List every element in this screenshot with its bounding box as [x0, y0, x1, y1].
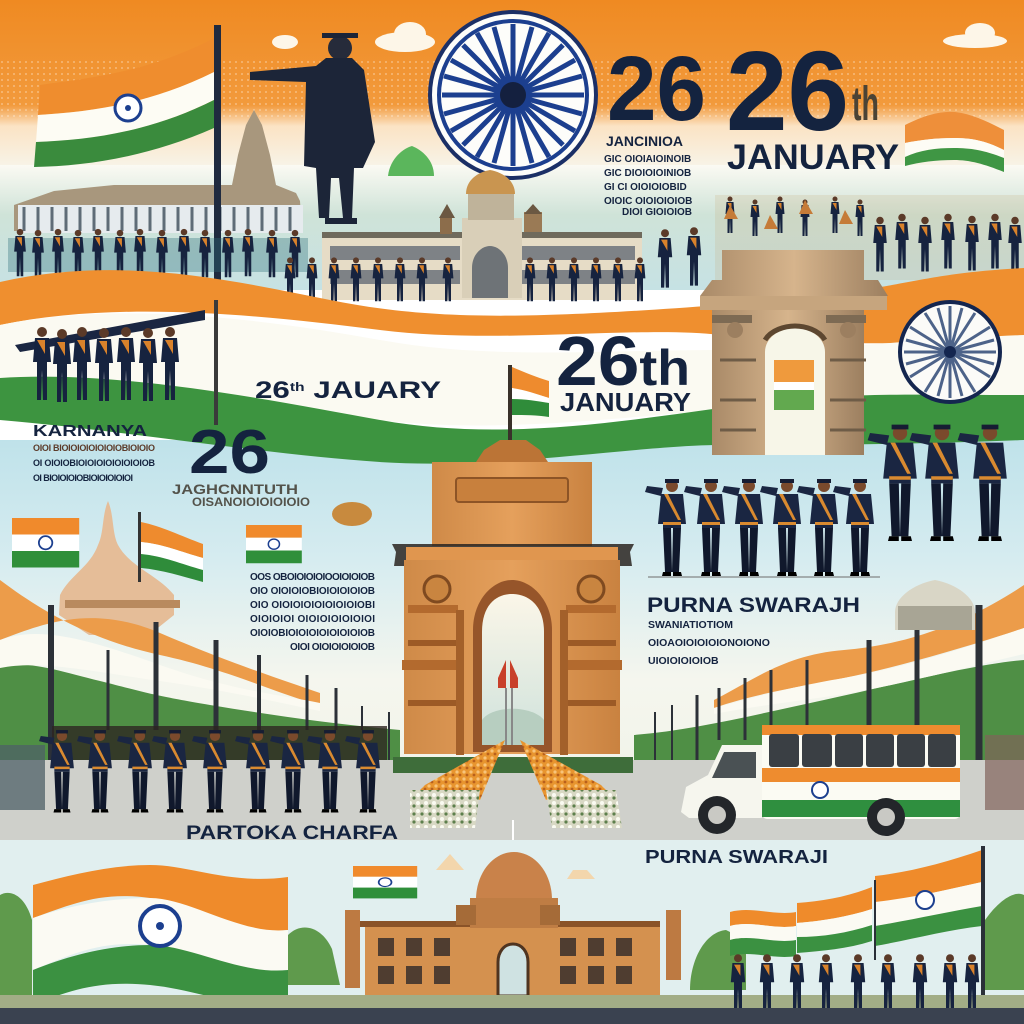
- dome right: [895, 580, 975, 630]
- text block right of gate: SWANIATIOTIOM: [648, 619, 733, 631]
- wave band: orange white green tricolor: [0, 268, 1024, 464]
- left text: karnanya: OI BIOIOIOIOBIOIOIOIOIOI: [33, 473, 133, 483]
- heading: 26 26 th: JANUARY: [727, 138, 899, 177]
- left text: karnanya: [33, 423, 156, 483]
- green dome sketch: [388, 146, 434, 176]
- small text block top centre: GIC OIOIAIOINOIB: [604, 154, 691, 165]
- bottom left flag: [33, 865, 288, 1007]
- marching band: [39, 726, 387, 812]
- lower right flags: [730, 846, 985, 1011]
- crowd: top right: [658, 195, 1024, 288]
- ground strip: [0, 995, 1024, 1010]
- heading: 26 26 th: 26: [607, 38, 706, 140]
- chakra right: [900, 302, 1000, 402]
- bus: [681, 725, 960, 836]
- background white ribbon left: [0, 634, 320, 711]
- heading: 26th january left of wave: 26: [255, 377, 282, 404]
- background orange ribbon left: [0, 580, 320, 705]
- heading: 26 26 th: [607, 28, 899, 177]
- soldiers row saluting: [645, 479, 880, 577]
- heading: 26 26 th: th: [852, 78, 879, 131]
- top left flag: [34, 25, 221, 280]
- ashoka chakra large: [430, 12, 596, 178]
- small text block top centre: [604, 133, 692, 218]
- background trees left: [0, 664, 400, 760]
- street poles left: [51, 605, 389, 800]
- label: partoka charfa: PARTOKA CHARFA: [186, 823, 398, 844]
- soldiers row saluting upper right: [868, 425, 1007, 541]
- text block: left of central gate: OIOIOIOI OIOIOIOIOIOIOI: [250, 614, 375, 625]
- central palace with dome: [322, 170, 642, 300]
- text block right of gate: UIOIOIOIOIOB: [648, 655, 719, 667]
- statue: standing leader silhouette: [250, 33, 375, 224]
- top right flag: [905, 112, 1004, 172]
- background trees right: [634, 660, 1024, 765]
- background white ribbon right: [714, 628, 1024, 714]
- heading: purna swaraj: PURNA SWARAJH: [647, 593, 860, 617]
- street poles right: [655, 605, 979, 800]
- crowd edge left: [0, 745, 45, 810]
- small text block top centre: OIOIC OIOIOIOIOB: [604, 196, 692, 207]
- text block right of gate: [648, 619, 770, 667]
- india gate small upper: [700, 250, 888, 455]
- background orange ribbon right: [714, 585, 1024, 708]
- small text block top centre: JANCINIOA: [606, 133, 683, 149]
- background: middle pale band: [0, 165, 1024, 290]
- small cloud shapes: [436, 854, 595, 879]
- text block: left of central gate: OIO OIOIOIOIOIOIOIOIOBI: [250, 600, 375, 611]
- heading: 26th january left of wave: JAUARY: [305, 377, 441, 404]
- text: subheading left: JAGHCNNTUTH: [172, 481, 298, 497]
- heading: 26th january centre: JANUARY: [560, 387, 691, 417]
- text block: left of central gate: OIOIOBIOIOIOIOIOIOIOIOB: [250, 628, 375, 639]
- bottom road: [0, 1008, 1024, 1024]
- road: [0, 760, 1024, 840]
- heading: 26 26 th: 26: [726, 28, 849, 154]
- text block: left of central gate: OIOI OIOIOIOIOIOB: [290, 642, 375, 653]
- crowd edge right: [985, 735, 1024, 810]
- text: OISANOIOIOIOIOIO: [192, 495, 310, 509]
- left small flags and dome: [12, 501, 372, 635]
- top left parliament building: [14, 110, 303, 233]
- background: lower pale band: [0, 440, 1024, 840]
- marching soldiers group on wave: [15, 300, 218, 425]
- small flag lower centre: [353, 866, 417, 898]
- left text: karnanya: OI OIOIOBIOIOIOIOIOIOIOIOB: [33, 458, 156, 468]
- heading: 26 left: 26: [189, 418, 270, 487]
- text block: left of central gate: OIO OIOIOIOBIOIOIOIOIOB: [250, 586, 375, 597]
- small text block top centre: GI CI OIOIOIOBID: [604, 182, 687, 193]
- heading: 26th january left of wave: th: [290, 380, 305, 394]
- left text: karnanya: KARNANYA: [33, 423, 148, 440]
- label: purna swarajh lower: PURNA SWARAJI: [645, 847, 828, 867]
- trees by lower building: [288, 927, 340, 985]
- text block: left of central gate: OOS OBOIOIOIOIOOIOIOIOB: [250, 572, 375, 583]
- lower palace: [345, 852, 681, 996]
- small text block top centre: GIC DIOIOIOINIOB: [604, 168, 691, 179]
- clouds: [272, 22, 1007, 52]
- small flag on wave centre: [508, 365, 549, 440]
- small text block top centre: DIOI GIOIOIOB: [622, 207, 692, 218]
- central india gate: [392, 440, 634, 755]
- crowd: top left: [8, 229, 645, 301]
- background: footer pale band: [0, 830, 1024, 1020]
- edge trees bottom left: [0, 893, 32, 1010]
- text block: left of central gate: [250, 572, 375, 653]
- background: top sky band: [0, 0, 1024, 175]
- flower beds: [393, 740, 633, 828]
- lower soldiers row: [731, 954, 979, 1013]
- text block right of gate: OIOAOIOIOIOIONOIONO: [648, 637, 770, 649]
- heading: 26th january centre: 26th: [556, 322, 690, 400]
- left text: karnanya: OIOI BIOIOIOIOIOIOIOBIOIOIO: [33, 443, 155, 453]
